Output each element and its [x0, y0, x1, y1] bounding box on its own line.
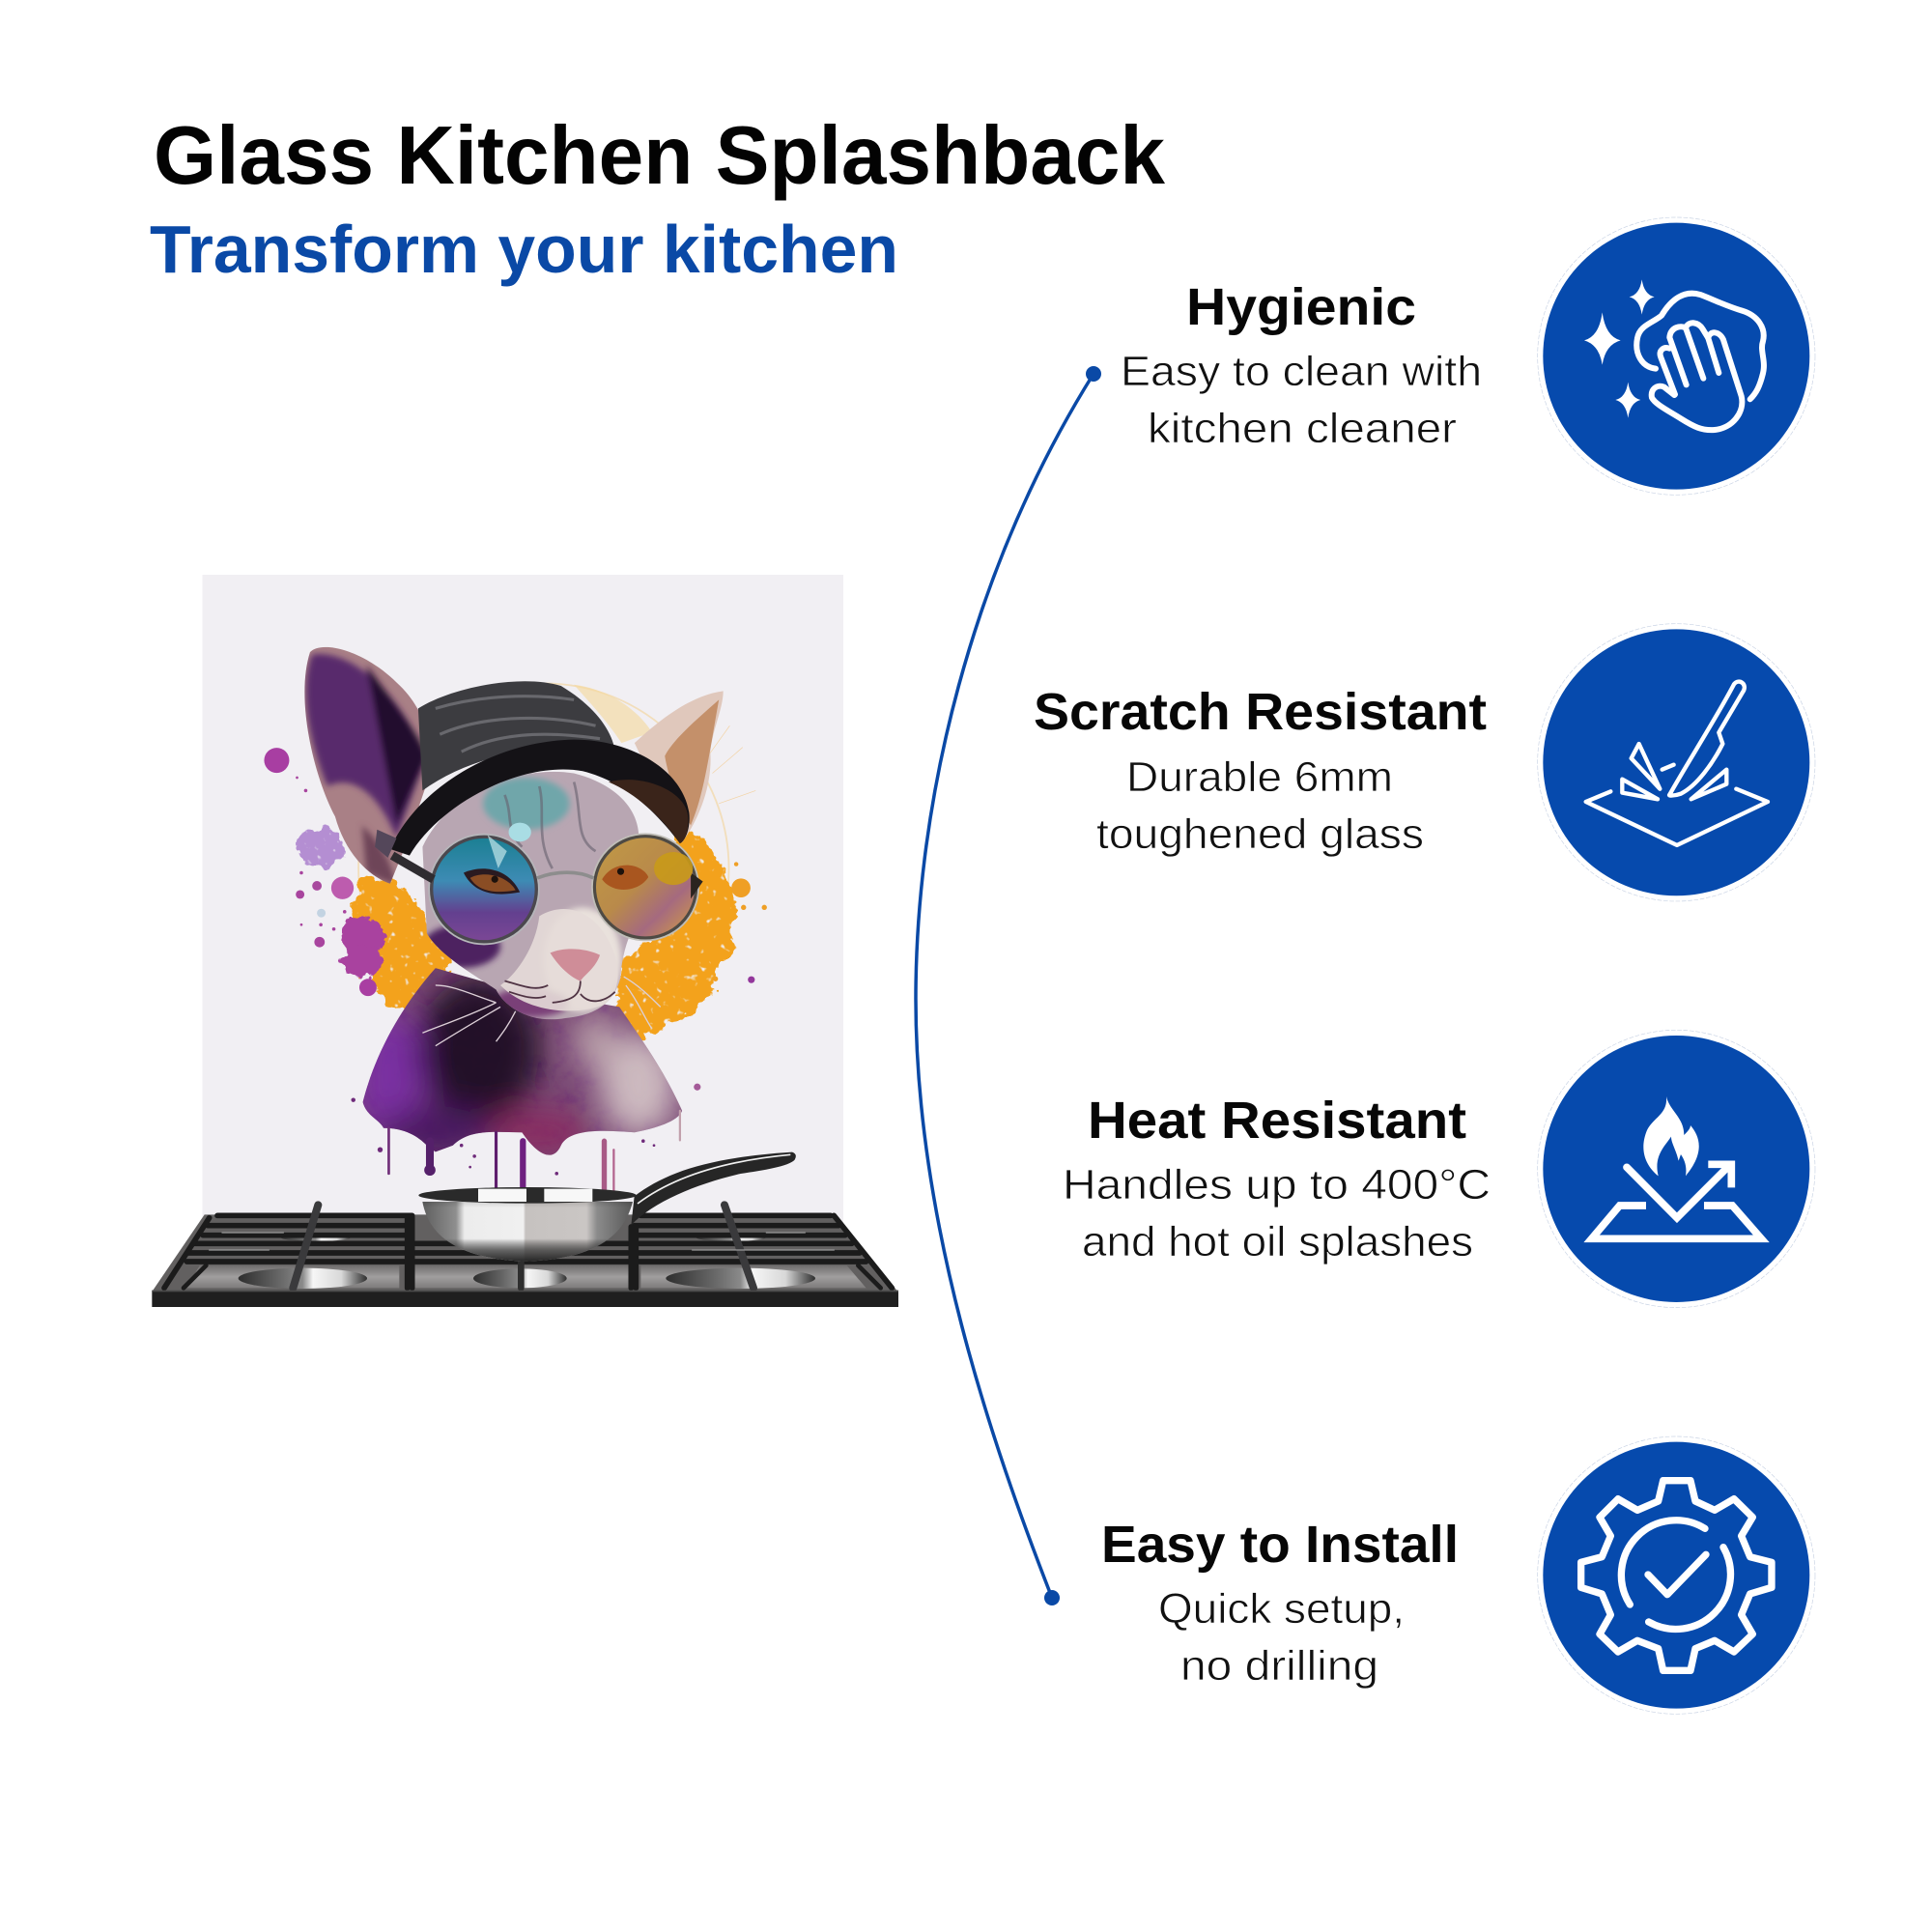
hat [375, 681, 690, 858]
feature text: Heat Resistant [1063, 1092, 1491, 1265]
feature text: Hygienic: Hygienic [1186, 278, 1416, 336]
cast iron grates [164, 1205, 892, 1288]
title: Glass Kitchen Splashback [154, 110, 1166, 202]
feature text: Easy to Install [1101, 1516, 1459, 1690]
steel trays [186, 1265, 867, 1288]
front edge [152, 1291, 898, 1307]
feature text: Heat Resistant: Heat Resistant [1088, 1092, 1466, 1150]
stove with pan [152, 1152, 898, 1307]
pan bowl [418, 1187, 637, 1262]
right ear [635, 691, 724, 842]
icon: gear with check mark [1538, 1436, 1815, 1714]
feature text: Scratch Resistant [1034, 683, 1487, 858]
burners [239, 1233, 815, 1289]
panel: splashback artwork [203, 575, 843, 1251]
round glasses [392, 823, 703, 944]
purple and orange droplets [264, 748, 767, 1091]
feature text: Heat Resistant: and hot oil splashes [1082, 1218, 1473, 1265]
feature text: Scratch Resistant: toughened glass [1096, 810, 1424, 858]
feature text: Scratch Resistant: Scratch Resistant [1034, 683, 1487, 741]
feature text: Easy to Install: Quick setup, [1158, 1585, 1405, 1633]
icon: knife scratching glass [1538, 624, 1815, 901]
illustration: cat in hat and glasses [264, 635, 767, 1191]
head [423, 771, 639, 1020]
body with drips [351, 968, 682, 1190]
feature text: Easy to Install: Easy to Install [1101, 1516, 1459, 1574]
icon: hand wiping with sparkles [1538, 217, 1815, 495]
left ear [304, 647, 425, 884]
hob surface [153, 1214, 896, 1291]
feature text: Scratch Resistant: Durable 6mm [1126, 753, 1393, 801]
connector curve [916, 366, 1101, 1605]
icon: flame above heat-reflecting surface [1538, 1030, 1815, 1308]
nose and mouth [422, 949, 661, 1046]
feature text: Hygienic: kitchen cleaner [1148, 405, 1457, 452]
feature text: Heat Resistant: Handles up to 400°C [1063, 1161, 1491, 1208]
orange paint splash [353, 683, 755, 1054]
feature text: Hygienic: Easy to clean with [1121, 348, 1482, 395]
feature text: Hygienic [1121, 278, 1482, 452]
subtitle: Transform your kitchen [150, 212, 898, 287]
pan handle [631, 1152, 796, 1225]
feature text: Easy to Install: no drilling [1180, 1642, 1378, 1690]
